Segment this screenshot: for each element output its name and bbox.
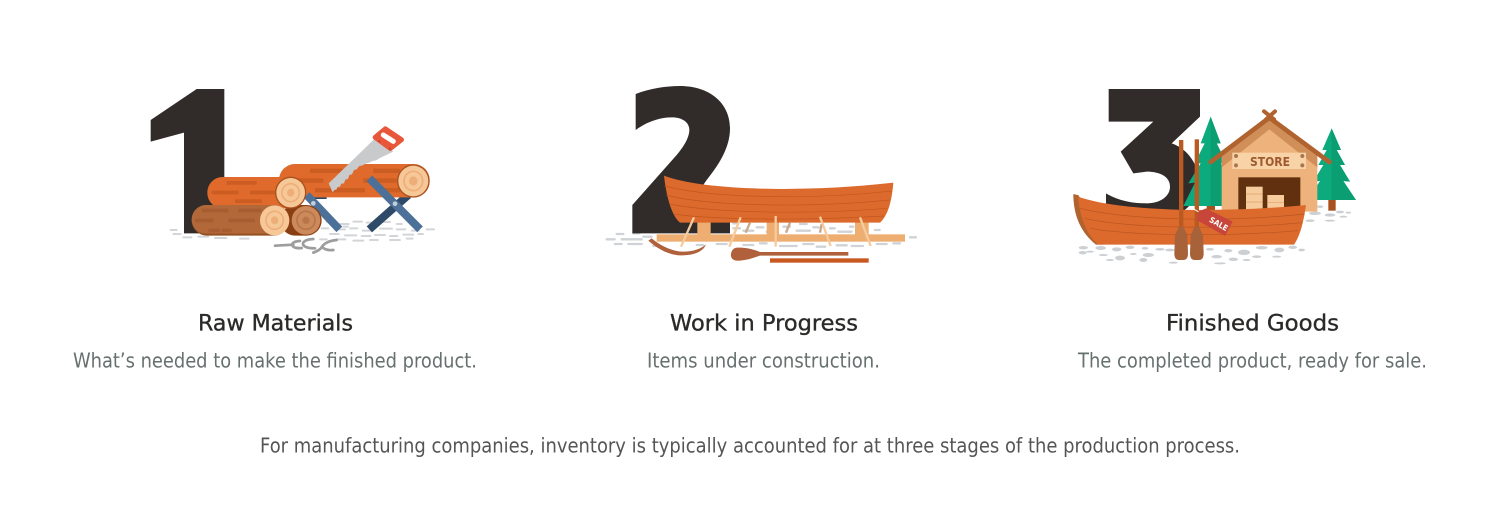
store sign: STORE <box>1250 155 1290 169</box>
sawhorse front legs <box>307 178 420 229</box>
log: middle <box>207 177 306 209</box>
heading: work in progress: Work in Progress <box>670 310 858 336</box>
curved rib <box>648 238 706 255</box>
ground specks <box>607 223 916 247</box>
stands and base plank <box>657 222 905 242</box>
log: top right <box>279 164 430 198</box>
saw <box>329 129 402 192</box>
tree: right <box>1307 128 1356 211</box>
sawhorse back legs <box>310 195 408 229</box>
ground specks <box>171 222 434 241</box>
door and boxes <box>1238 177 1300 212</box>
sale tag: SALE <box>1208 215 1229 233</box>
wood shavings <box>275 239 337 253</box>
oars <box>1174 139 1204 260</box>
text: work in progress description: Items under construction. <box>647 348 880 372</box>
paddle <box>731 248 848 261</box>
number 3 <box>1106 89 1200 220</box>
log: bottom front <box>192 205 289 236</box>
text: finished goods description: The completed product, ready for sale. <box>1077 348 1427 372</box>
heading: raw materials: Raw Materials <box>198 310 353 336</box>
caption: For manufacturing companies, inventory is typically accounted for at three stages of the production process. <box>260 434 1240 458</box>
background struts <box>746 223 822 233</box>
sale tag <box>1194 208 1233 236</box>
front struts <box>681 216 871 247</box>
heading: finished goods: Finished Goods <box>1166 310 1339 336</box>
finished boat <box>1073 194 1306 245</box>
number 2 <box>632 86 730 233</box>
text: raw materials description: What’s needed to make the finished product. <box>73 348 477 372</box>
log: back bottom <box>280 205 322 236</box>
plank <box>770 258 869 263</box>
number 1 <box>151 89 224 233</box>
panel: raw materials illustration <box>151 89 434 253</box>
ground specks <box>1079 205 1351 264</box>
boat hull <box>664 176 893 223</box>
tree: left <box>1183 117 1238 213</box>
panel: finished goods illustration <box>1073 89 1356 264</box>
panel: work in progress illustration <box>607 86 916 263</box>
store building <box>1211 111 1329 212</box>
